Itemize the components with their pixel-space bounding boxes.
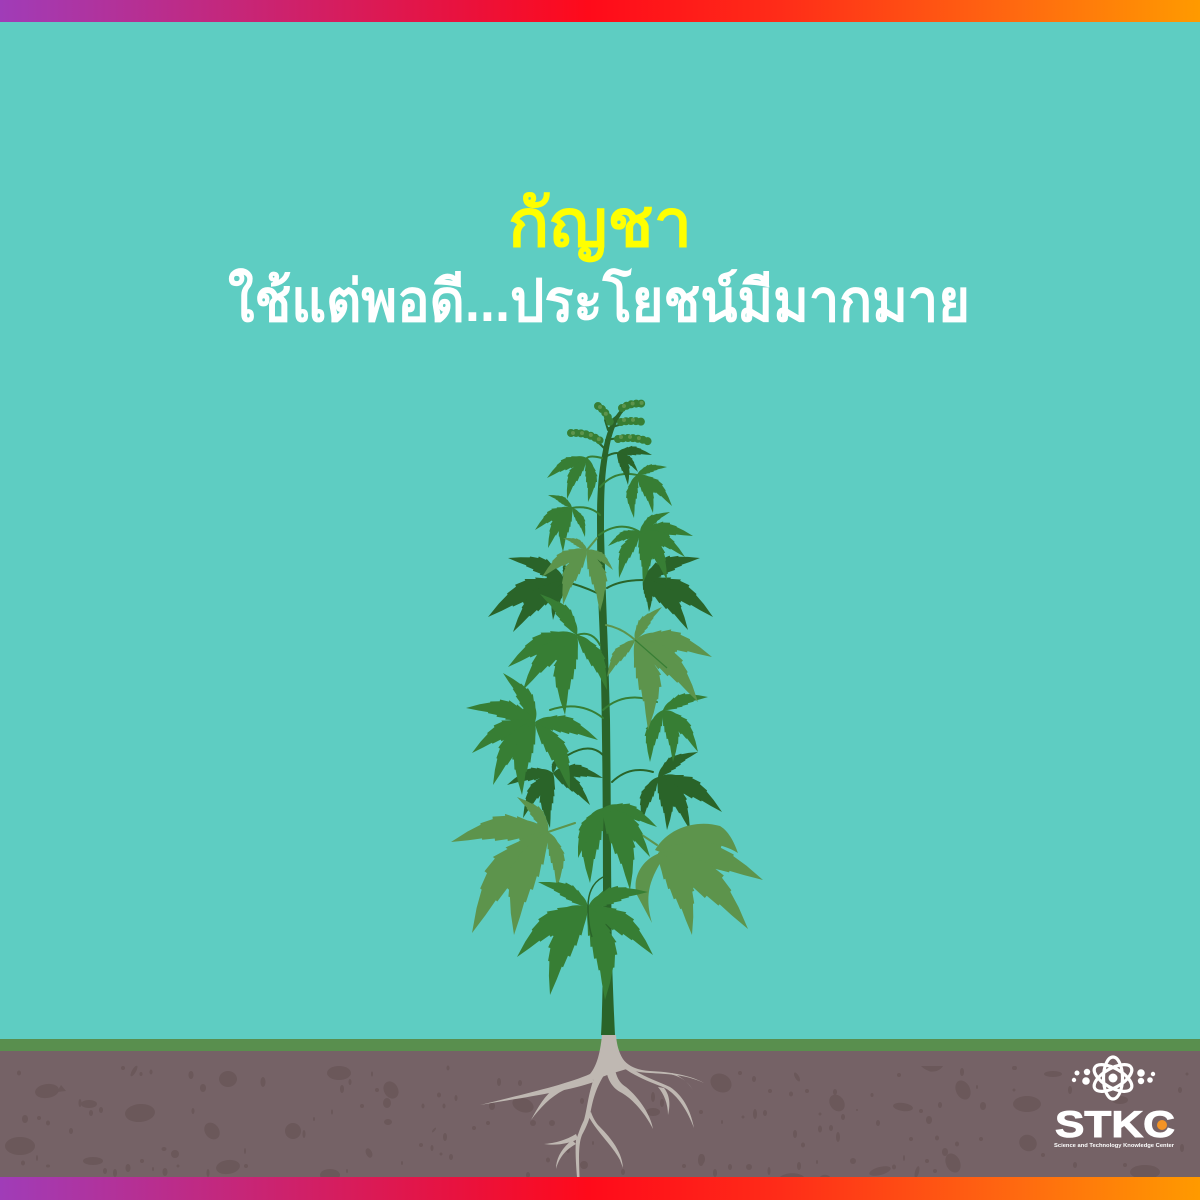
top gradient bar [0, 0, 1200, 22]
leaf: dark mid left [480, 545, 571, 635]
leaf: upper right [605, 505, 694, 583]
leaf: middle right [638, 687, 709, 763]
leaf: light upper centre [536, 532, 618, 613]
leaf: light lower left [449, 790, 570, 937]
grass strip [0, 1039, 1200, 1051]
subheading: ใช้แต่พอดี...ประโยชน์มีมากมาย [228, 266, 970, 334]
logo tagline: Science and Technology Knowledge Center [1054, 1143, 1175, 1149]
soil [0, 1051, 1200, 1181]
leaf: dark lower right [632, 743, 730, 832]
leaf: dark mid right [638, 545, 722, 632]
heading: cannabis: กัญชา [508, 186, 692, 262]
leaf: light lower right [636, 824, 769, 937]
logo wordmark: STKC [1055, 1104, 1175, 1145]
leaf: light middle right [598, 601, 716, 731]
roots [480, 1035, 704, 1177]
plant [449, 403, 769, 1177]
logo: STKC [1054, 1057, 1175, 1149]
leaf: lower left large [465, 666, 602, 796]
bottom gradient bar [0, 1177, 1200, 1200]
flower buds [571, 403, 650, 448]
leaf: centre lower [566, 796, 661, 891]
leaf: bottom [506, 870, 664, 1001]
leaf: top right [624, 460, 679, 518]
leaf: upper left [530, 489, 592, 552]
title [228, 186, 970, 334]
stem [597, 406, 626, 1035]
leaf: dark upper right small [615, 445, 652, 486]
bottom leaf petiole [588, 877, 603, 937]
logo orange dot [1157, 1120, 1167, 1130]
icon: atom [1072, 1057, 1155, 1099]
leaf: middle left [501, 585, 620, 716]
petioles [548, 453, 657, 845]
leaf: dark lower left [504, 753, 604, 828]
leaf: top left [542, 449, 598, 502]
